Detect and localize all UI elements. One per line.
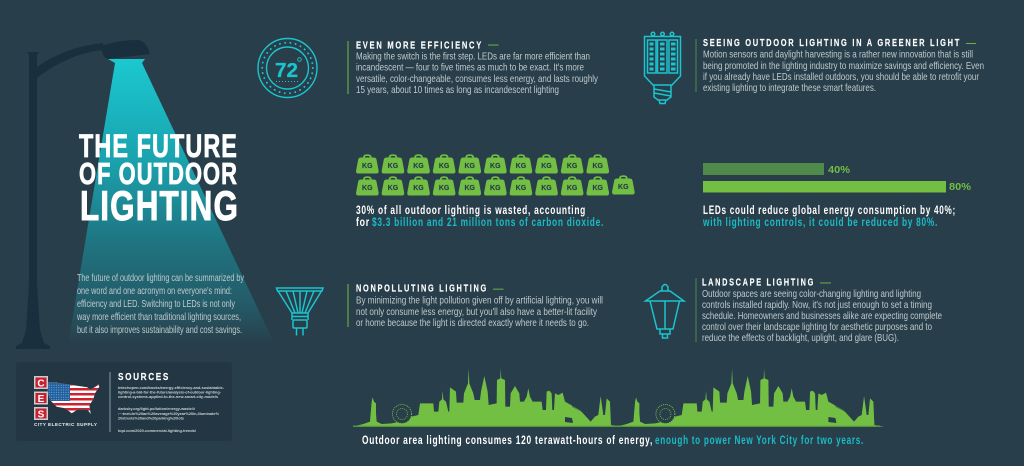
body text: incandescent — four to five times as much to be exact. It's more [356,63,584,74]
body text: schedule. Homeowners and businesses alike are expecting complete [702,311,942,322]
source links: :~:text=In%20an%20average%20year%20in,illuminate% [118,412,220,416]
intro text: one word and one acronym on everyone's mind: [77,286,232,297]
body text: control over their landscape lighting for aesthetic purposes and to [702,322,932,333]
bar chart: energy reduction [703,163,972,193]
bar chart: energy reduction: 40% [828,164,851,176]
chart: KG weights pictogram: KG [413,185,424,192]
icon: lantern [646,284,684,338]
body text: Outdoor spaces are seeing color-changing lighting and lighting [702,289,921,300]
stat: wasted lighting: $3.3 billion and 21 million tons of carbon dioxide. [372,217,604,229]
chart: KG weights pictogram: KG [592,185,604,192]
stat: wasted lighting: for [356,217,370,229]
body text: not only consume less energy, but you'll also have a better-lit facility [356,307,598,318]
title [79,128,239,229]
skyline illustration [353,368,884,427]
title: OF OUTDOOR [79,156,238,191]
source links: topi.com/2020-commercial-lighting-trends/ [118,429,197,433]
chart: KG weights pictogram: KG [490,163,501,170]
title: LIGHTING [80,182,239,229]
body text [703,50,984,94]
chart: KG weights pictogram [356,154,635,196]
chart: KG weights pictogram: KG [592,163,604,170]
intro text: efficiency and LED. Switching to LEDs is not only [77,299,236,310]
panel: seeing outdoor lighting in a greener light [696,37,984,94]
heading: EVEN MORE EFFICIENCY [356,40,483,52]
sources heading: SOURCES [118,372,170,383]
chart: KG weights pictogram: KG [490,185,501,192]
stat: energy reduction [702,205,956,229]
heading: NONPOLLUTING LIGHTING [356,283,488,295]
chart: KG weights pictogram: KG [541,185,552,192]
panel: even more efficiency [348,40,599,96]
logo: City Electric Supply: E [38,394,45,405]
source links: 20streets%20and%20parking%20lots [118,417,184,421]
body text: 15 years, about 10 times as long as incandescent lighting [356,85,559,96]
chart: KG weights pictogram: KG [464,185,476,192]
body text: existing lighting to integrate these smart features. [703,83,876,94]
caption: New York City: Outdoor area lighting consumes 120 terawatt-hours of energy, [362,435,653,447]
chart: KG weights pictogram: KG [516,185,527,192]
stat: wasted lighting [356,205,604,229]
intro text: The future of outdoor lighting can be summarized by [77,273,245,284]
logo: City Electric Supply: CITY ELECTRIC SUPPLY [34,422,97,427]
body text: or home because the light is directed exactly where it needs to go. [356,318,589,329]
body text: By minimizing the light pollution given off by artificial lighting, you will [356,295,603,306]
source links [118,386,225,433]
icon: thermostat [258,38,317,98]
chart: KG weights pictogram: KG [388,185,399,192]
heading: LANDSCAPE LIGHTING [702,276,815,288]
body text: controls installed rapidly. Now, it's not just enough to set a timing [702,300,932,311]
source links: darksky.org/light-pollution/energy-waste/# [118,407,196,411]
body text: Making the switch is the first step. LEDs are far more efficient than [356,52,590,62]
stat: energy reduction: with lighting controls, it could be reduced by 80%. [702,217,938,229]
body text: reduce the effects of backlight, uplight, and glare (BUG). [702,333,899,344]
chart: KG weights pictogram: KG [567,163,578,170]
source links: lighting-a-bid-for-the-future/analysis-of-outdoor-lighting- [118,391,222,395]
chart: KG weights pictogram: KG [439,163,450,170]
icon: street lamp [16,40,150,349]
chart: KG weights pictogram: KG [362,185,373,192]
caption: New York City: enough to power New York City for two years. [655,435,864,447]
panel: landscape lighting [696,276,942,344]
chart: KG weights pictogram: KG [439,185,450,192]
chart: KG weights pictogram: KG [362,163,373,170]
icon: corn LED bulb [644,32,680,104]
body text [702,289,942,344]
panel: sources [34,372,224,433]
chart: KG weights pictogram: KG [413,163,424,170]
source links: intechopen.com/books/energy-efficiency-and-sustainable- [118,386,225,390]
logo: City Electric Supply: S [38,410,45,420]
logo: City Electric Supply: C [37,378,45,390]
chart: KG weights pictogram: KG [567,185,578,192]
body text [356,52,599,96]
intro text: way more efficient than traditional lighting sources, [76,312,241,323]
logo: City Electric Supply [34,376,100,427]
title: THE FUTURE [79,128,238,164]
chart: KG weights pictogram: KG [516,163,527,170]
chart: KG weights pictogram: KG [464,163,476,170]
body text: versatile, color-changeable, consumes less energy, and lasts roughly [356,74,599,85]
panel: nonpolluting lighting [348,283,603,329]
stat: wasted lighting: 30% of all outdoor lighting is wasted, accounting [356,205,586,217]
light beam [68,59,275,345]
intro text [76,273,245,336]
icon: flood bulb [276,288,323,336]
chart: KG weights pictogram: KG [541,163,552,170]
intro text: but it also improves sustainability and cost savings. [77,325,242,336]
icon: thermostat: 72 [275,60,298,82]
source links: control-systems-applied-to-the-new-smart-city-models [118,395,218,399]
bar chart: energy reduction: 80% [949,181,972,193]
chart: KG weights pictogram: KG [618,184,629,191]
body text [356,295,603,329]
chart: KG weights pictogram: KG [388,163,399,170]
